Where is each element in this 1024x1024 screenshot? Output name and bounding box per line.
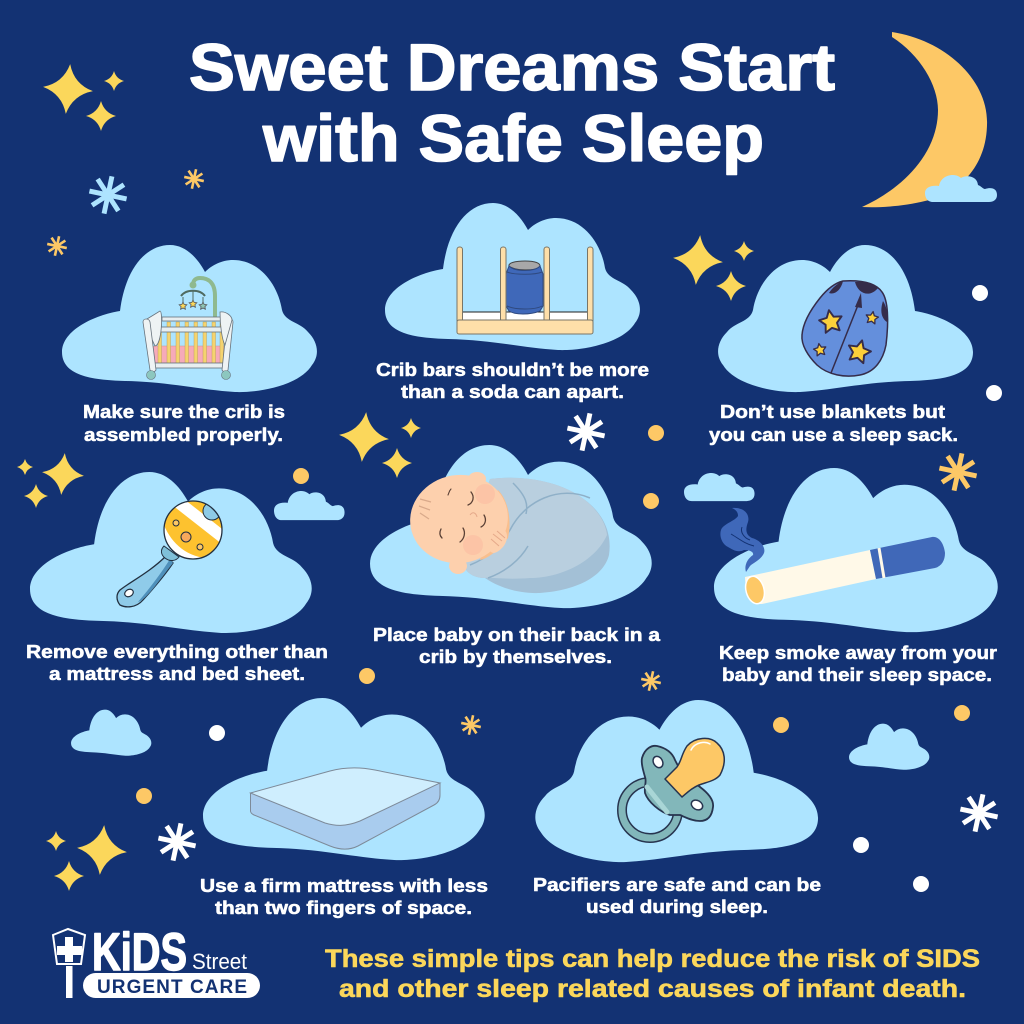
title [189, 30, 835, 175]
cloud: pacifier [535, 700, 818, 862]
decorative asterisks [47, 169, 998, 861]
icon: cigarette with smoke [720, 508, 945, 606]
panel: crib assembled [62, 245, 317, 445]
label: crib assembled [83, 402, 285, 445]
icon: swaddled baby [403, 467, 610, 593]
cloud: crib [62, 245, 317, 392]
label: pacifier: used during sleep. [586, 897, 768, 917]
label: sleep sack: you can use a sleep sack. [709, 425, 958, 445]
icon: rattle [117, 501, 224, 607]
label: sleep sack: Don’t use blankets but [720, 402, 945, 422]
cloud: rattle [30, 472, 312, 633]
cloud: baby [370, 445, 652, 608]
icon: crescent moon with cloud [862, 32, 997, 207]
panel: place baby on back [370, 445, 661, 667]
label: pacifier [533, 875, 821, 917]
icon: mattress [250, 768, 440, 849]
label: place baby on back: crib by themselves. [419, 647, 612, 667]
decorative dots [136, 285, 1002, 892]
decorative small clouds [71, 473, 929, 770]
panel: sleep sack [709, 245, 973, 445]
label: pacifier: Pacifiers are safe and can be [533, 875, 821, 895]
footer message [325, 945, 980, 1003]
icon: crib with mobile [143, 278, 233, 380]
panel: smoke [714, 468, 998, 685]
cloud: sleep sack [718, 245, 973, 392]
label: firm mattress [200, 876, 488, 918]
label: crib bars: than a soda can apart. [401, 382, 624, 402]
icon: sleep sack [802, 281, 888, 376]
icon: crib bars with soda can [457, 247, 593, 334]
footer message: These simple tips can help reduce the risk of SIDS [325, 945, 980, 973]
label: smoke [719, 643, 997, 685]
panel: firm mattress [200, 698, 488, 918]
panel: pacifier [533, 700, 821, 917]
label: crib bars: Crib bars shouldn’t be more [376, 360, 649, 380]
logo: Kids Street Urgent Care: Street [192, 949, 247, 974]
label: firm mattress: than two fingers of space. [215, 898, 472, 918]
label: firm mattress: Use a firm mattress with less [200, 876, 488, 896]
panel: remove everything [26, 472, 328, 684]
footer message: and other sleep related causes of infant death. [339, 975, 966, 1003]
label: crib assembled: assembled properly. [84, 425, 283, 445]
cloud: mattress [203, 698, 485, 860]
panel: crib bars [376, 203, 649, 402]
label: place baby on back [373, 625, 661, 667]
label: remove everything: a mattress and bed sheet. [49, 664, 305, 684]
label: crib assembled: Make sure the crib is [83, 402, 285, 422]
decorative stars [17, 62, 754, 891]
label: remove everything: Remove everything other than [26, 642, 328, 662]
logo: Kids Street Urgent Care: KiDS [92, 923, 187, 982]
label: crib bars [376, 360, 649, 402]
label: sleep sack [709, 402, 958, 445]
icon: pacifier [622, 738, 724, 838]
cloud: smoke [714, 468, 998, 632]
label: smoke: Keep smoke away from your [719, 643, 997, 663]
title: with Safe Sleep [262, 101, 764, 175]
label: place baby on back: Place baby on their back in a [373, 625, 661, 645]
icon: lantern post [53, 929, 85, 998]
title: Sweet Dreams Start [189, 30, 835, 104]
logo: Kids Street Urgent Care: URGENT CARE [97, 977, 247, 998]
label: smoke: baby and their sleep space. [722, 665, 992, 685]
logo: Kids Street Urgent Care [53, 923, 260, 998]
label: remove everything [26, 642, 328, 684]
cloud: crib bars [385, 203, 640, 350]
